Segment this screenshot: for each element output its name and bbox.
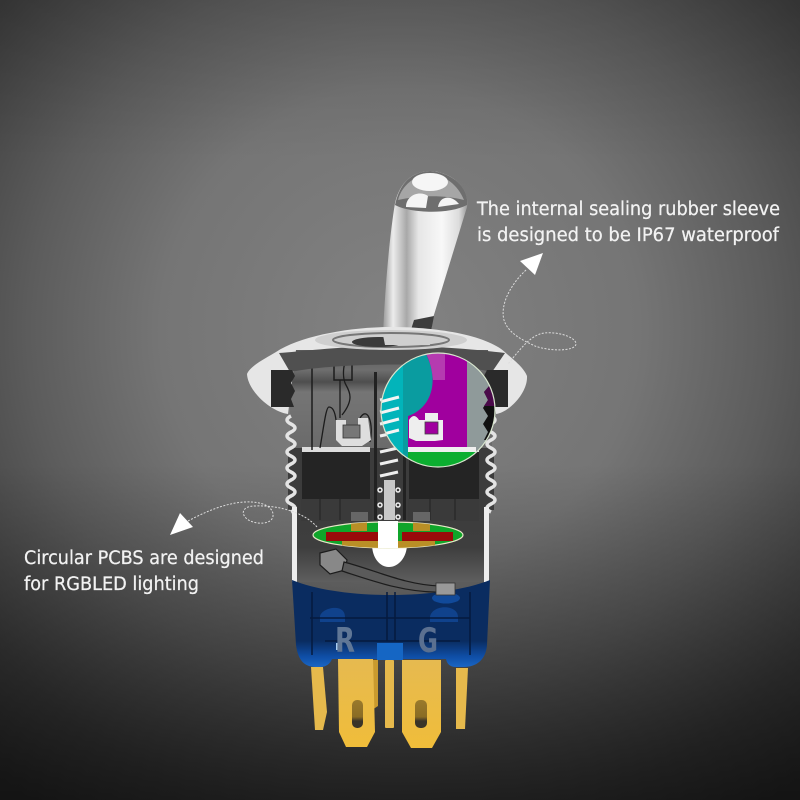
flange and nut (247, 327, 527, 414)
letters R G: R (335, 621, 355, 661)
callout: PCB (24, 502, 317, 595)
threaded body (287, 347, 495, 582)
blue base (292, 580, 490, 667)
plunger (372, 521, 407, 567)
dashed arrow (503, 253, 576, 364)
toggle switch (247, 171, 527, 748)
pcb highlight (313, 520, 463, 550)
letters R G: G (418, 621, 438, 661)
magnifier (380, 350, 500, 470)
callout text: for RGBLED lighting (24, 574, 199, 595)
dashed arrow (170, 502, 317, 535)
callout: waterproof sleeve (476, 199, 780, 364)
spring (378, 396, 400, 520)
letters R G (335, 621, 438, 661)
lever base (383, 335, 430, 345)
callout text: is designed to be IP67 waterproof (477, 225, 779, 246)
callout text (24, 548, 264, 595)
callout text (476, 199, 780, 246)
wire (320, 549, 455, 595)
terminals (311, 659, 468, 748)
callout text: Circular PCBS are designed (24, 548, 264, 569)
lever (383, 171, 467, 342)
callout text: The internal sealing rubber sleeve (476, 199, 780, 220)
